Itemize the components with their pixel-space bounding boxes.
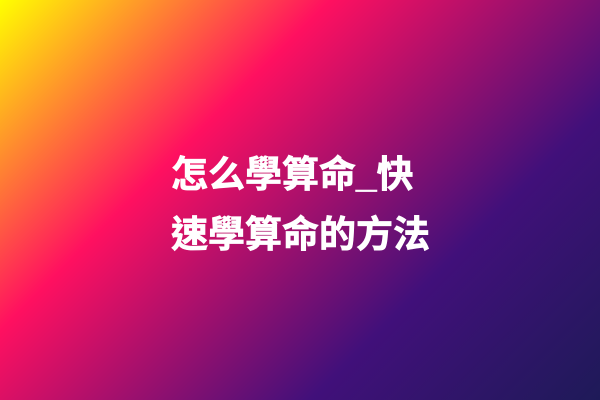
title: 速學算命的方法 — [171, 214, 430, 255]
title — [171, 154, 430, 255]
title: 怎么學算命_快 — [171, 154, 414, 195]
